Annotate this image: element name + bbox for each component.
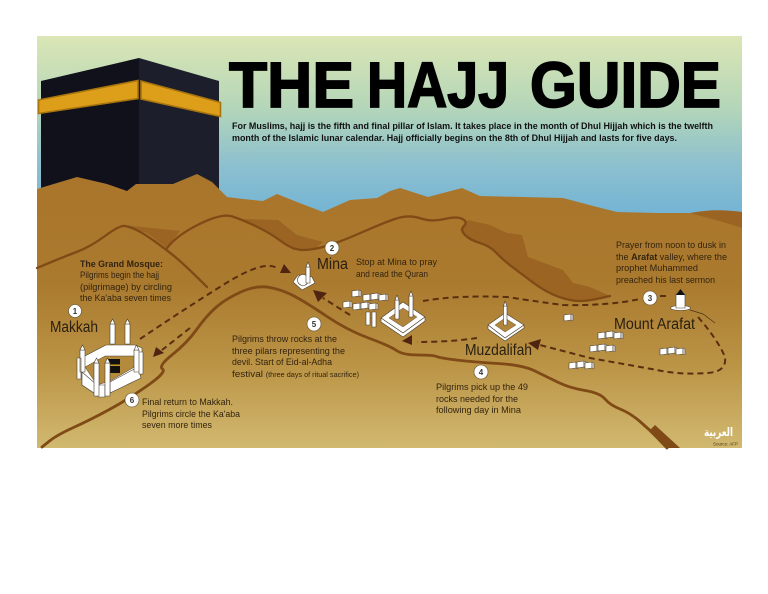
route: return to Makkah <box>153 328 190 357</box>
logo and source: العربية <box>704 425 733 439</box>
icon: Mina mosque <box>293 262 315 290</box>
step 3: Mount Arafat: preached his last sermon <box>616 275 715 286</box>
step 1: The Grand Mosque: The Grand Mosque: <box>80 259 163 270</box>
step 1: The Grand Mosque <box>50 259 172 336</box>
route: Muzdalifah to Jamarat <box>402 335 477 345</box>
icon: Grand Mosque <box>77 319 143 397</box>
step 4: Muzdalifah: rocks needed for the <box>436 394 518 405</box>
step 5: stoning the pillars <box>232 317 359 380</box>
intro text <box>232 120 713 143</box>
step 3: Mount Arafat: 3 <box>648 294 653 303</box>
title: HAJJ <box>367 49 509 121</box>
step 2: Mina: Stop at Mina to pray <box>356 257 437 268</box>
step 5: stoning the pillars: 5 <box>312 320 317 329</box>
icon: Mina tent camp <box>343 290 388 327</box>
step 3: Mount Arafat: Prayer from noon to dusk in <box>616 240 726 251</box>
icon: Mount Arafat monument <box>670 289 690 310</box>
step 2: Mina <box>317 241 437 280</box>
step 4: Muzdalifah: Pilgrims pick up the 49 <box>436 382 528 393</box>
icon: Arafat tents <box>564 314 685 369</box>
step 1: The Grand Mosque: the Ka'aba seven times <box>80 293 171 304</box>
step 1: The Grand Mosque: Makkah <box>50 319 98 336</box>
route: Makkah to Mina <box>140 264 291 339</box>
route: Jamarat to Mina <box>313 290 350 315</box>
logo and source <box>704 425 738 448</box>
step 4: Muzdalifah <box>436 342 532 416</box>
step 2: Mina: and read the Quran <box>356 269 428 280</box>
icon: Muzdalifah mosque <box>488 301 524 341</box>
step 4: Muzdalifah: 4 <box>479 368 484 377</box>
step 5: stoning the pillars: three pilars representing the <box>232 346 345 357</box>
icon: Ka'aba <box>38 58 220 200</box>
sky background <box>37 36 742 236</box>
step 3: Mount Arafat: Mount Arafat <box>614 316 696 333</box>
step 2: Mina: 2 <box>330 244 335 253</box>
step 6: final return: 6 <box>130 396 135 405</box>
step 4: Muzdalifah: Muzdalifah <box>465 342 532 359</box>
intro text: month of the Islamic lunar calendar. Hajj officially begins on the 8th of Dhul Hijjah and lasts for five days. <box>232 132 677 143</box>
step 1: The Grand Mosque: Pilgrims begin the hajj <box>80 270 159 281</box>
terrain: ridges and shaded slopes <box>37 210 742 448</box>
step 3: Mount Arafat: prophet Muhammed <box>616 263 698 274</box>
title: GUIDE <box>530 49 721 121</box>
step 3: Mount Arafat: the Arafat valley, where the <box>616 252 727 263</box>
step 5: stoning the pillars: devil. Start of Eid-al-Adha <box>232 357 333 368</box>
logo and source: Source: AFP <box>713 442 738 448</box>
desert ground <box>37 174 742 448</box>
step 1: The Grand Mosque: 1 <box>73 307 78 316</box>
step 4: Muzdalifah: following day in Mina <box>436 405 522 416</box>
step 6: final return <box>125 393 241 431</box>
step 6: final return: Final return to Makkah. <box>142 397 233 408</box>
step 1: The Grand Mosque: (pilgrimage) by circling <box>80 282 172 293</box>
step 6: final return: seven more times <box>142 420 212 431</box>
step 5: stoning the pillars: festival (three days of ritual sacrifice) <box>232 369 359 380</box>
route: Mina to Arafat <box>423 296 668 305</box>
step 6: final return: Pilgrims circle the Ka'aba <box>142 409 241 420</box>
step 2: Mina: Mina <box>317 256 348 273</box>
title <box>229 49 721 121</box>
title: THE <box>229 49 354 121</box>
step 5: stoning the pillars: Pilgrims throw rocks at the <box>232 334 337 345</box>
route: Arafat to Muzdalifah <box>528 317 725 374</box>
icon: Jamarat pillars <box>381 291 425 337</box>
step 3: Mount Arafat <box>614 240 727 333</box>
intro text: For Muslims, hajj is the fifth and final pillar of Islam. It takes place in the month of Dhul Hijjah which is the twelfth <box>232 120 713 131</box>
